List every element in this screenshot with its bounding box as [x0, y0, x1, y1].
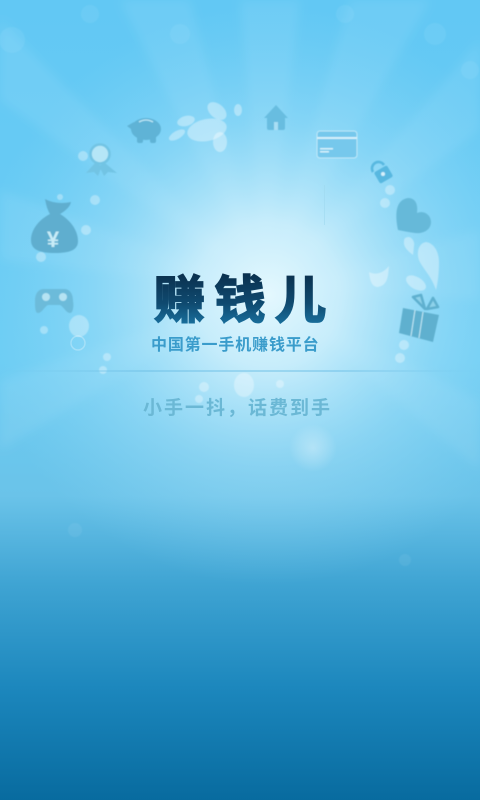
faint bubbles: [0, 5, 479, 566]
dots trail: [36, 151, 409, 403]
icon: money bag: [31, 199, 78, 253]
soft light spot: [289, 424, 337, 472]
icon: heart: [396, 198, 431, 233]
icon: game controller: [35, 289, 73, 313]
icon: bank card: [317, 131, 357, 158]
icon: piggy bank: [127, 118, 161, 143]
light rays: [0, 0, 480, 470]
divider line: [0, 370, 480, 372]
icon: padlock: [372, 162, 393, 184]
icon: house: [264, 105, 288, 130]
icon: gift box: [399, 295, 439, 342]
icon: leaf sprig: [167, 99, 242, 152]
title: 赚钱儿: [154, 272, 336, 329]
icon: money bag: ¥: [47, 227, 60, 252]
subtitle: 中国第一手机赚钱平台: [151, 335, 320, 354]
small ring near controller: [71, 336, 85, 350]
white droplets by gift: [369, 237, 439, 294]
tagline: 小手一抖，话费到手: [143, 397, 332, 419]
icon: ribbon badge: [86, 144, 117, 176]
central glow: [0, 0, 480, 640]
